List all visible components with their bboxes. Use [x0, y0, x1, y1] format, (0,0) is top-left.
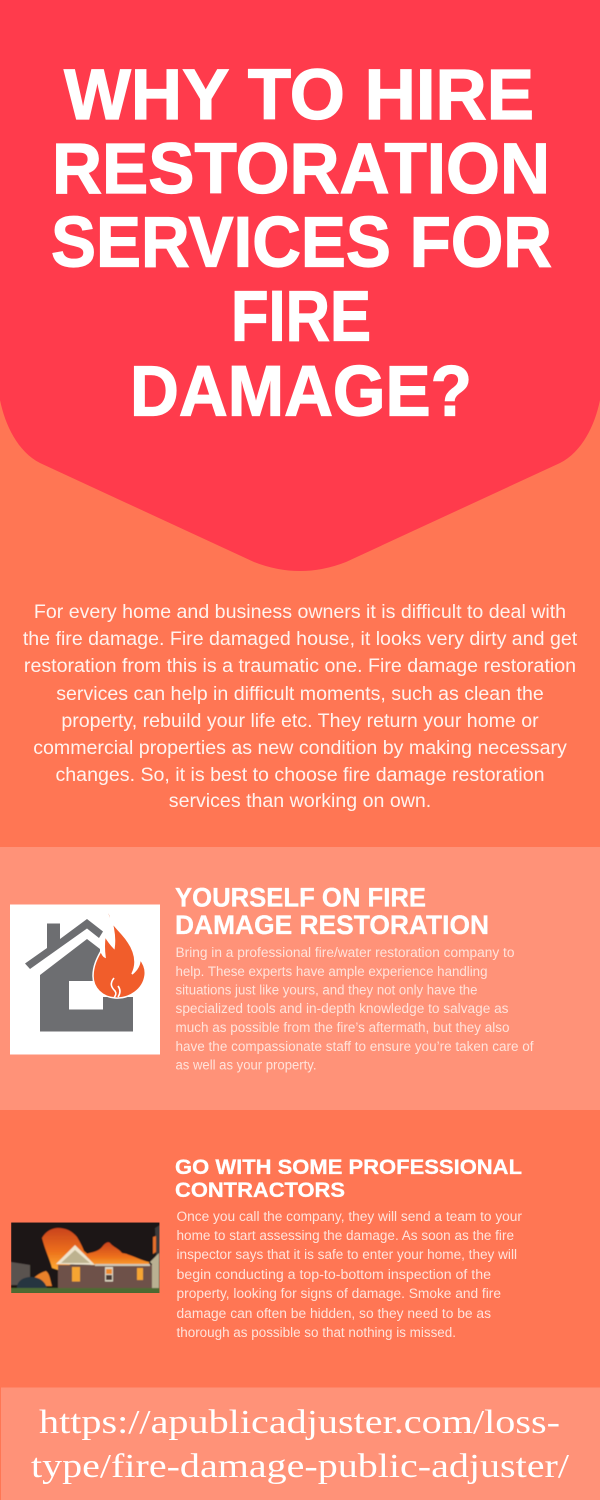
- body text: section one: help. These experts have ample experience handling: [176, 964, 488, 979]
- intro paragraph: changes. So, it is best to choose fire damage restoration: [55, 764, 545, 786]
- body text: section two: [176, 1209, 523, 1340]
- panel: website link footer: [1, 1388, 600, 1500]
- heading: yourself on fire damage restoration: YOURSELF ON FIRE: [175, 882, 426, 912]
- heading: yourself on fire damage restoration: DAMAGE RESTORATION: [175, 910, 489, 940]
- intro paragraph: the fire damage. Fire damaged house, it looks very dirty and get: [23, 628, 578, 650]
- title: WHY TO HIRE: [64, 56, 534, 135]
- body text: section two: thorough as possible so that nothing is missed.: [176, 1325, 456, 1340]
- intro paragraph: restoration from this is a traumatic one. Fire damage restoration: [24, 655, 576, 677]
- body text: section one: much as possible from the fire’s aftermath, but they also: [176, 1020, 510, 1035]
- body text: section two: damage can often be hidden, so they need to be as: [176, 1306, 491, 1321]
- website link text: type/fire-damage-public-adjuster/: [31, 1448, 570, 1485]
- body text: section one: situations just like yours, and they not only have the: [176, 982, 478, 998]
- website link text: https://apublicadjuster.com/loss-: [39, 1404, 560, 1441]
- panel: yourself on fire damage restoration: [0, 847, 600, 1110]
- website link text: [31, 1404, 570, 1485]
- body text: section one: [176, 945, 534, 1072]
- heading: go with some professional contractors: [175, 1155, 522, 1202]
- heading: go with some professional contractors: CONTRACTORS: [175, 1178, 345, 1202]
- title: DAMAGE?: [130, 352, 472, 432]
- body text: section two: begin conducting a top-to-bottom inspection of the: [176, 1267, 491, 1282]
- body text: section one: as well as your property.: [176, 1058, 316, 1072]
- intro paragraph: [23, 601, 578, 812]
- body text: section two: Once you call the company, they will send a team to your: [176, 1209, 523, 1224]
- title: [51, 56, 552, 432]
- heading: yourself on fire damage restoration: [175, 882, 489, 940]
- panel: red title banner: [0, 0, 600, 571]
- intro paragraph: services than working on own.: [169, 790, 431, 812]
- heading: go with some professional contractors: GO WITH SOME PROFESSIONAL: [175, 1155, 522, 1179]
- body text: section one: have the compassionate staff to ensure you’re taken care of: [176, 1039, 534, 1054]
- icon: house on fire: [10, 904, 160, 1054]
- intro paragraph: property, rebuild your life etc. They return your home or: [61, 710, 539, 732]
- body text: section two: property, looking for signs of damage. Smoke and fire: [176, 1286, 501, 1301]
- photo: burning house: [11, 1222, 160, 1294]
- body text: section two: home to start assessing the damage. As soon as the fire: [176, 1228, 514, 1243]
- title: FIRE: [231, 278, 371, 356]
- intro paragraph: commercial properties as new condition by making necessary: [33, 737, 567, 759]
- intro paragraph: services can help in difficult moments, such as clean the: [56, 683, 544, 705]
- intro paragraph: For every home and business owners it is difficult to deal with: [34, 601, 566, 623]
- body text: section one: Bring in a professional fire/water restoration company to: [176, 945, 514, 960]
- body text: section two: inspector says that it is safe to enter your home, they will: [176, 1247, 517, 1262]
- title: SERVICES FOR: [51, 204, 552, 282]
- title: RESTORATION: [52, 130, 550, 209]
- body text: section one: specialized tools and in-depth knowledge to salvage as: [176, 1001, 509, 1016]
